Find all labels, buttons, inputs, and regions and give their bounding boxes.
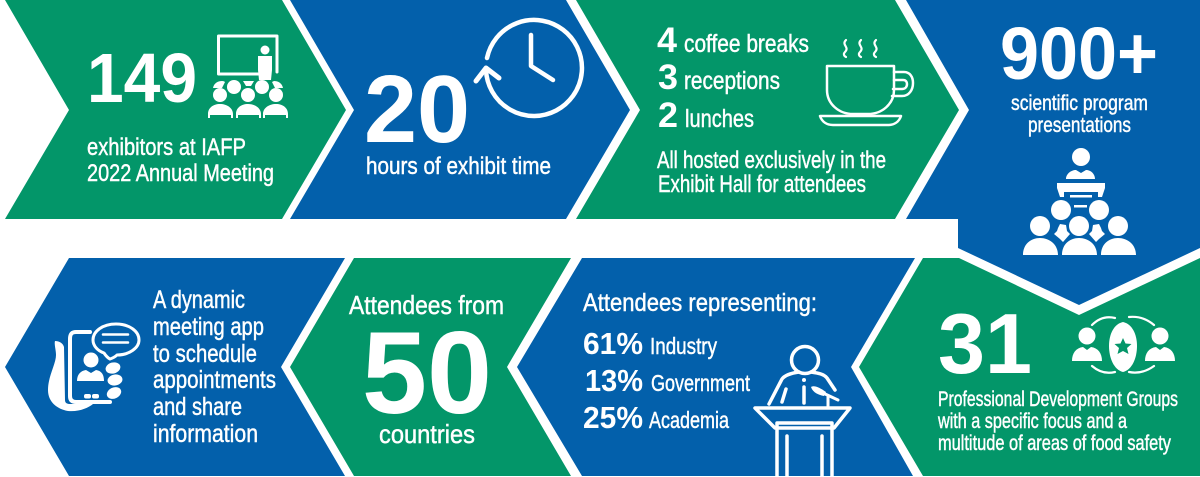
panel: meeting app — [5, 258, 345, 476]
list: coffee breaks, receptions, lunches: coffee breaks — [684, 30, 809, 58]
text: app description — [153, 286, 276, 448]
panel: exhibit time — [290, 0, 630, 219]
text: groups caption — [937, 388, 1178, 455]
icon: clock — [476, 20, 582, 116]
text: attendees heading: Attendees representing: — [583, 289, 817, 317]
panel: attendees representing — [517, 258, 915, 476]
text: countries: countries — [379, 419, 475, 449]
text: app description: information — [153, 420, 258, 448]
number: 31: 31 — [938, 297, 1032, 392]
list: attendee percentages: Industry — [650, 333, 717, 359]
list: coffee breaks, receptions, lunches: 4 — [657, 21, 678, 60]
list: attendee percentages: 25% — [583, 400, 643, 435]
list: coffee breaks, receptions, lunches: receptions — [684, 67, 780, 95]
number: 20: 20 — [364, 56, 470, 163]
text: exhibitors caption: 2022 Annual Meeting — [87, 160, 274, 187]
list: coffee breaks, receptions, lunches: 3 — [658, 58, 678, 97]
list: coffee breaks, receptions, lunches: 2 — [658, 96, 678, 135]
list: attendee percentages: 61% — [583, 326, 643, 361]
text: exhibitors caption: exhibitors at IAFP — [87, 134, 246, 161]
panel: scientific program — [906, 0, 1200, 305]
list: attendee percentages: 13% — [585, 363, 643, 398]
list: attendee percentages: Academia — [649, 407, 729, 433]
text: program caption: presentations — [1028, 113, 1131, 137]
text: app description: appointments — [153, 366, 276, 394]
icon: classroom — [208, 36, 288, 118]
text: app description: A dynamic — [153, 286, 245, 314]
text: hosted note: All hosted exclusively in the — [657, 147, 886, 174]
number: 900+: 900+ — [1000, 12, 1158, 95]
icon: speaker and audience — [1023, 148, 1136, 255]
number: 149: 149 — [87, 39, 197, 117]
list: attendee percentages — [583, 326, 750, 435]
text: exhibitors caption — [87, 134, 274, 187]
text: app description: to schedule — [153, 340, 257, 368]
text: attendees from: Attendees from — [349, 290, 504, 320]
text: app description: meeting app — [153, 313, 264, 341]
icon: phone app — [48, 324, 139, 411]
list: attendee percentages: Government — [651, 370, 750, 396]
text: exhibit time caption: hours of exhibit time — [366, 153, 551, 180]
text: groups caption: with a specific focus and a — [937, 410, 1127, 433]
panel: countries — [290, 258, 571, 476]
text: program caption: scientific program — [1011, 91, 1148, 115]
list: coffee breaks, receptions, lunches: lunches — [685, 105, 754, 133]
number: 50: 50 — [362, 307, 492, 438]
icon: groups exchange — [1072, 317, 1175, 373]
icon: coffee cup — [820, 40, 913, 125]
list: coffee breaks, receptions, lunches — [657, 21, 809, 135]
text: hosted note: Exhibit Hall for attendees — [658, 171, 866, 198]
panel: breaks and receptions — [576, 0, 959, 219]
icon: speaker at lectern — [755, 346, 850, 476]
panel: exhibitors — [5, 0, 346, 219]
text: app description: and share — [153, 393, 242, 421]
panel: professional development groups — [859, 258, 1200, 476]
text: program caption — [1011, 91, 1148, 137]
text: hosted note — [657, 147, 886, 198]
